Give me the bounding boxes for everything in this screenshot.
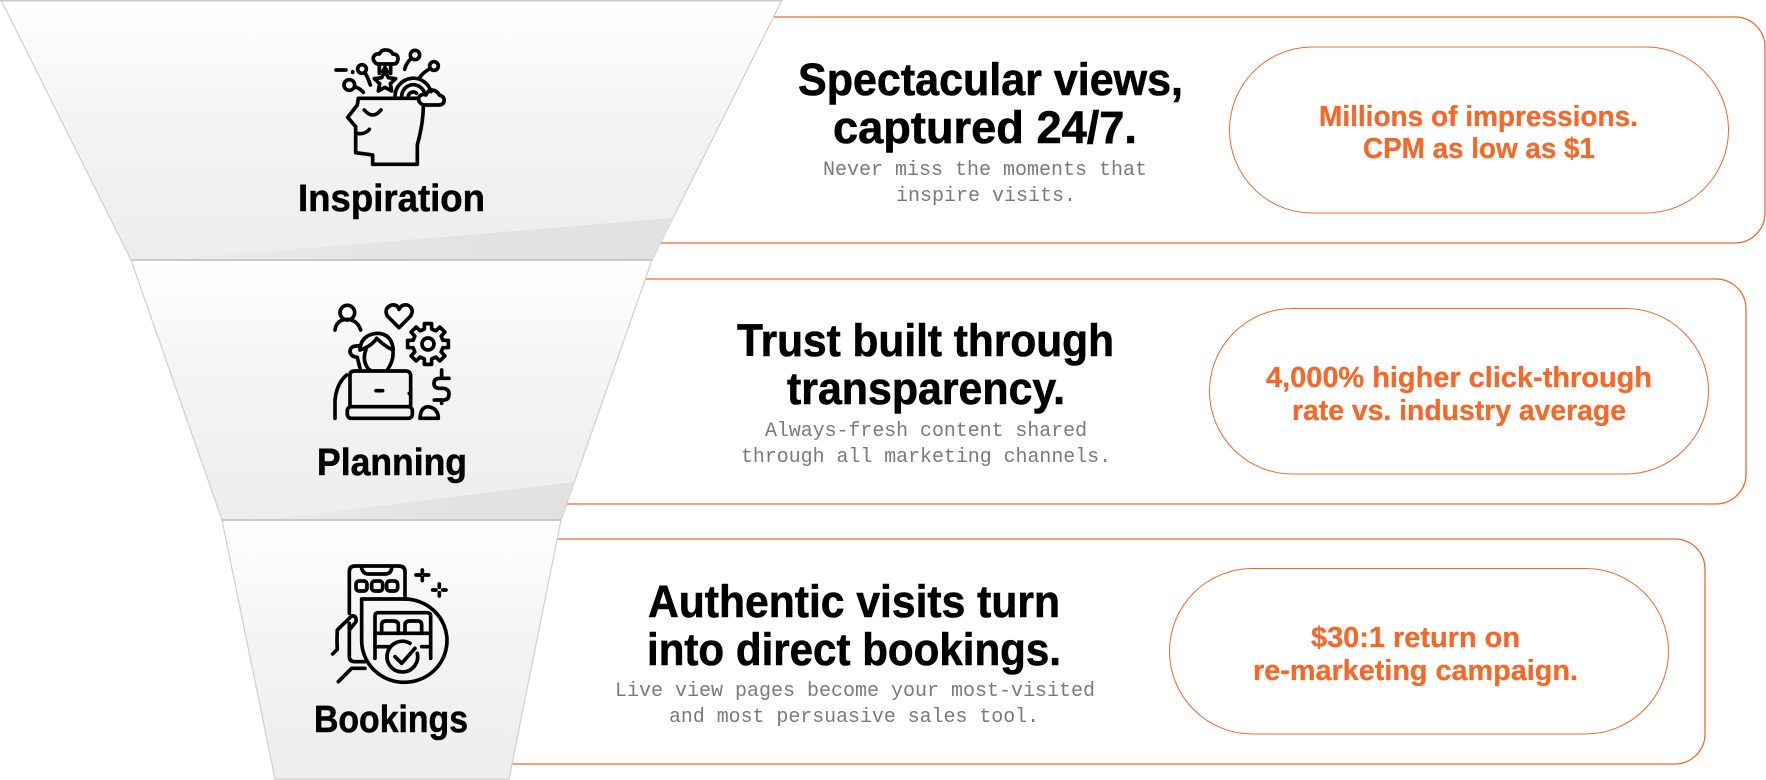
icon: head with ideas — [336, 50, 444, 164]
card outline: planning — [400, 279, 1746, 504]
callout pill: impressions: CPM as low as $1 — [1363, 133, 1595, 165]
text block: inspiration description: inspire visits. — [896, 185, 1076, 208]
text block: planning description: Always-fresh content shared — [765, 420, 1087, 443]
callout pill: return: $30:1 return on — [1311, 622, 1520, 654]
heading: spectacular views: captured 24/7. — [833, 102, 1137, 153]
text block: bookings description — [615, 680, 1095, 729]
panel: bookings row — [222, 520, 1705, 779]
text block: bookings description: and most persuasive sales tool. — [669, 706, 1039, 729]
heading: spectacular views — [798, 54, 1183, 153]
callout pill: impressions: Millions of impressions. — [1319, 101, 1638, 133]
callout pill: click-through: rate vs. industry average — [1292, 395, 1626, 427]
panel: planning row — [131, 260, 1746, 520]
text block: inspiration description — [823, 159, 1147, 208]
callout pill: click-through: 4,000% higher click-through — [1266, 362, 1652, 394]
text block: planning description — [741, 420, 1111, 469]
label: inspiration: Inspiration — [298, 178, 485, 220]
heading: authentic visits — [647, 576, 1061, 675]
panel: inspiration row — [0, 0, 1765, 260]
callout pill: click-through — [1210, 308, 1708, 474]
callout pill: impressions — [1230, 47, 1728, 213]
heading: trust built: transparency. — [787, 363, 1065, 414]
text block: bookings description: Live view pages become your most-visited — [615, 680, 1095, 703]
text block: planning description: through all marketing channels. — [741, 446, 1111, 469]
icon: person at laptop — [335, 305, 449, 418]
label: planning: Planning — [317, 442, 467, 484]
card outline: bookings — [400, 539, 1705, 764]
text block: inspiration description: Never miss the moments that — [823, 159, 1147, 182]
card outline: inspiration — [400, 17, 1765, 243]
callout pill: return — [1170, 568, 1668, 734]
heading: trust built: Trust built through — [737, 315, 1114, 366]
label: bookings: Bookings — [314, 699, 468, 741]
heading: authentic visits: into direct bookings. — [647, 624, 1061, 675]
callout pill: return: re-marketing campaign. — [1253, 655, 1578, 687]
heading: spectacular views: Spectacular views, — [798, 54, 1183, 105]
icon: phone with bed booking — [333, 566, 447, 682]
funnel segment: bookings — [222, 520, 561, 779]
heading: trust built — [737, 315, 1114, 414]
funnel segment: planning — [131, 260, 652, 520]
funnel segment: inspiration — [0, 0, 782, 260]
heading: authentic visits: Authentic visits turn — [648, 576, 1060, 627]
